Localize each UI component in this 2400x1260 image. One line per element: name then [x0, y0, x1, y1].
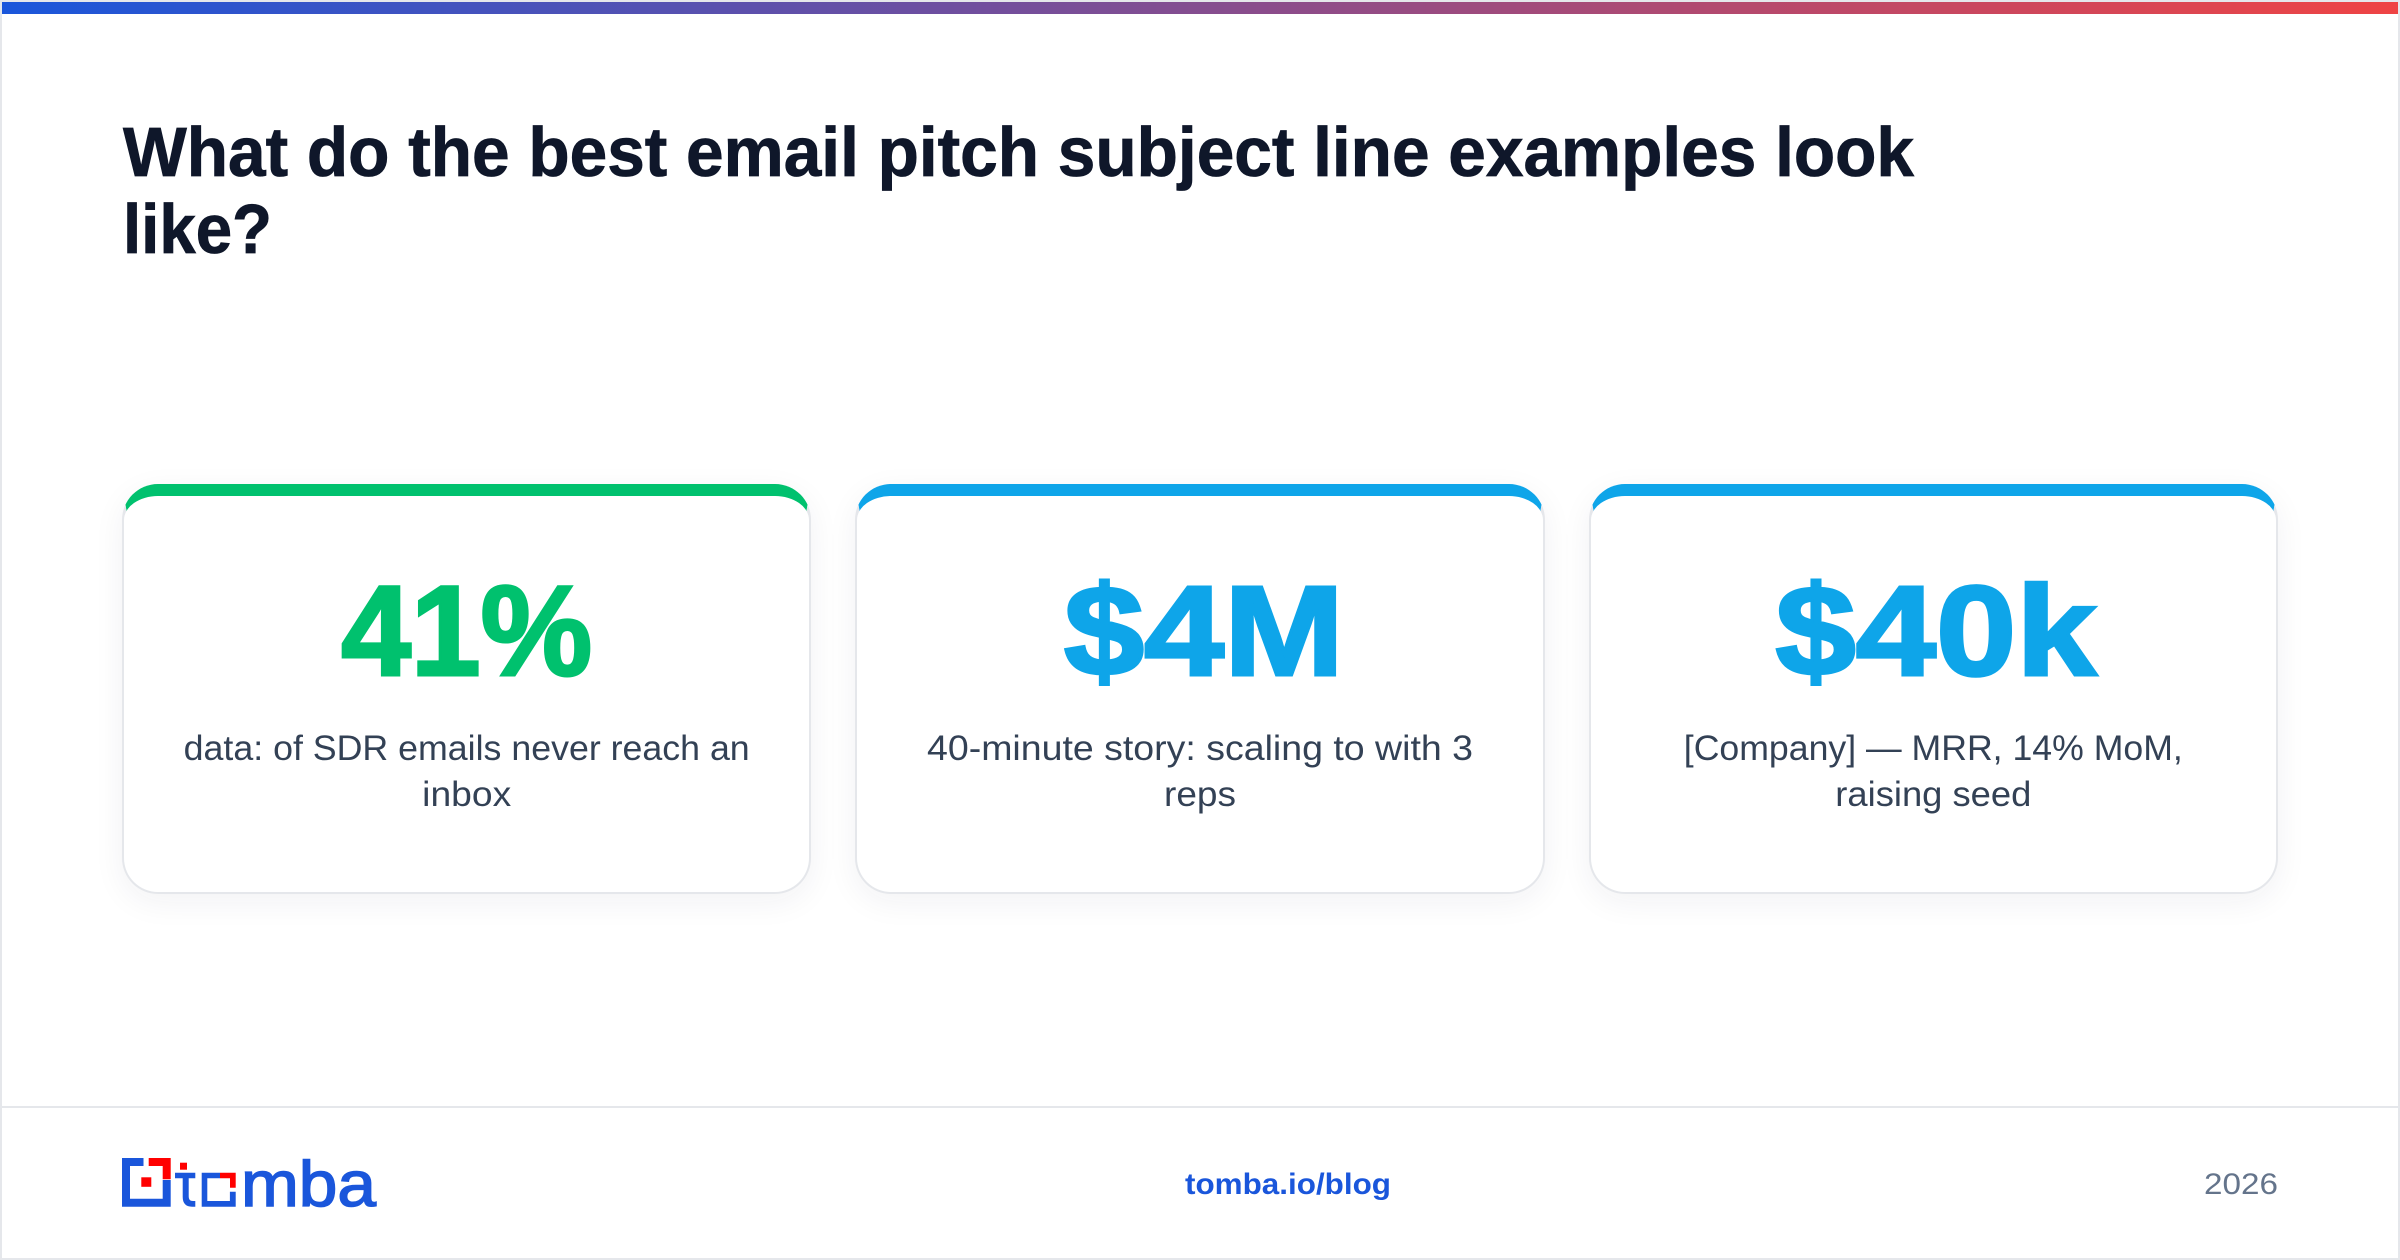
panel: 41% stat: [184, 560, 750, 814]
panel: $4M stat: [927, 560, 1473, 814]
stat value: 41%: 41%: [341, 560, 592, 703]
title: [123, 113, 1914, 268]
logo: tomba: [122, 1148, 376, 1220]
stat description: [1684, 729, 2183, 814]
stat value: $4M: $4M: [1064, 560, 1344, 703]
logo letter t: [175, 1163, 195, 1207]
stat description: data: of SDR emails never reach an: [184, 729, 750, 768]
stat description: [927, 729, 1473, 814]
footer link: tomba.io/blog: [1185, 1168, 1391, 1201]
stat value: $40k: $40k: [1776, 560, 2097, 703]
stat description: [184, 729, 750, 814]
card: 41% background: [122, 484, 811, 894]
title: What do the best email pitch subject line examples look: [123, 113, 1914, 191]
top gradient bar: [2, 2, 2398, 14]
card: $40k background: [1589, 484, 2278, 894]
stat description: [Company] — MRR, 14% MoM,: [1684, 729, 2183, 768]
stat description: reps: [1164, 775, 1236, 814]
stat description: inbox: [422, 775, 512, 814]
title: like?: [123, 190, 272, 268]
card: $4M background: [855, 484, 1545, 894]
footer year: 2026: [2204, 1168, 2278, 1201]
stat description: raising seed: [1835, 775, 2031, 814]
footer divider: [2, 1106, 2398, 1108]
stat description: 40-minute story: scaling to with 3: [927, 729, 1473, 768]
icon: logo mark: [122, 1158, 171, 1207]
logo letter o: [202, 1173, 236, 1207]
logo wordmark: mba: [241, 1148, 376, 1220]
panel: $40k stat: [1684, 560, 2183, 814]
